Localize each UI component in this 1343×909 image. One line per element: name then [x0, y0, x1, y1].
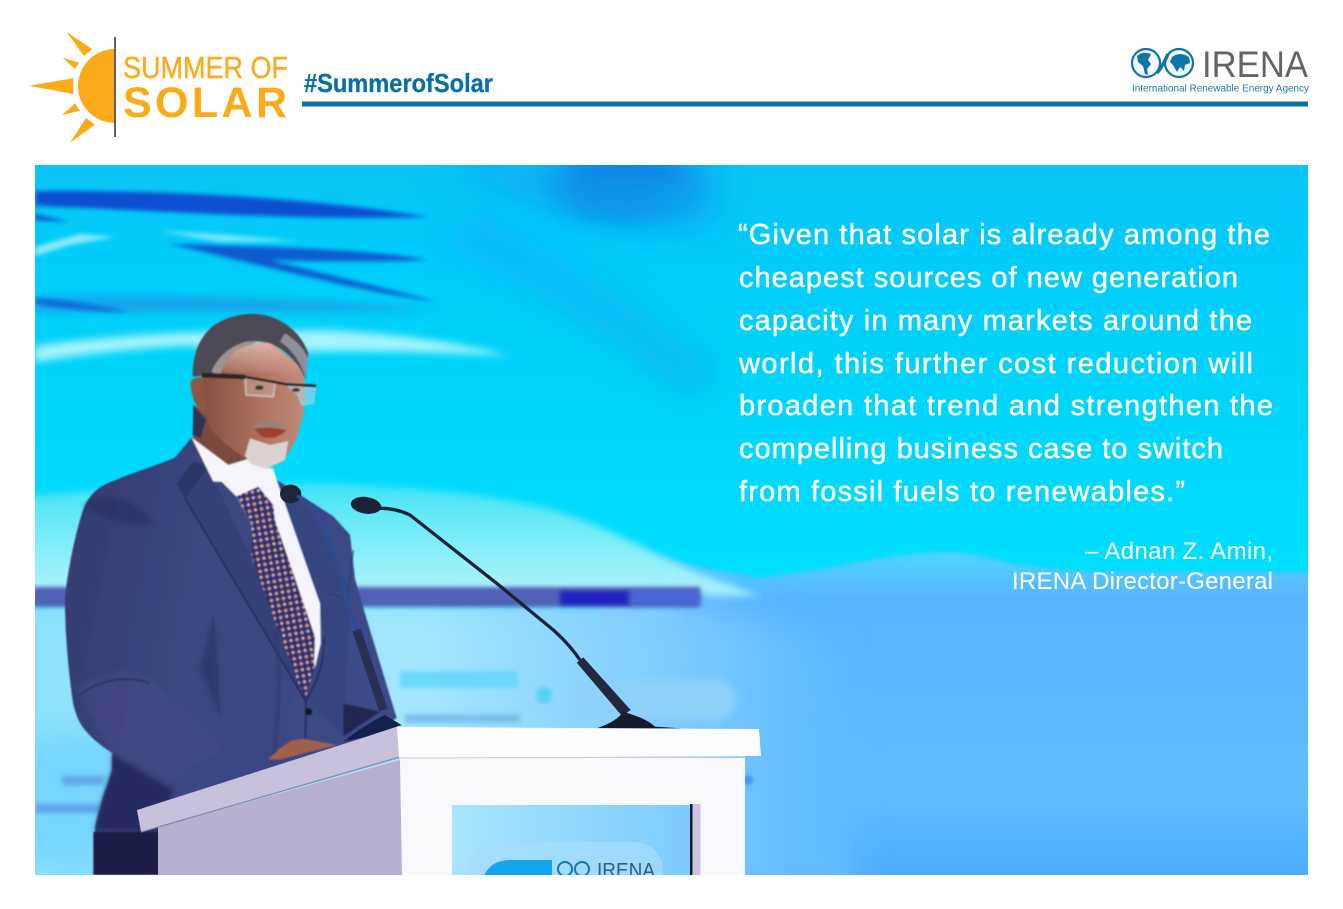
sleeve and pocket gap — [343, 703, 380, 737]
suit — [65, 438, 397, 875]
jacket button — [305, 708, 312, 715]
attribution: IRENA Director-General — [1012, 568, 1273, 595]
podium front — [400, 758, 745, 875]
light area above the band — [20, 483, 760, 596]
quote: from fossil fuels to renewables.” — [739, 476, 1185, 508]
podium screen — [452, 805, 691, 875]
logo text: Summer of: SUMMER OF — [123, 51, 288, 85]
screen logo: IRENA — [597, 860, 656, 882]
speaker — [65, 314, 397, 875]
shirt — [208, 468, 321, 667]
necktie — [237, 487, 315, 700]
podium top front — [397, 727, 761, 758]
hashtag: #SummerofSolar — [304, 68, 493, 98]
blurred screen text — [400, 671, 518, 688]
microphone: speaker side — [280, 485, 402, 742]
attribution: – Adnan Z. Amin, — [1085, 538, 1273, 565]
collar — [192, 438, 277, 482]
podium side panel — [158, 760, 402, 875]
icon: infinity globes — [1132, 49, 1193, 77]
dark band — [30, 587, 700, 607]
light streaks — [35, 234, 115, 256]
quote: compelling business case to switch — [739, 433, 1223, 465]
logo: Summer of Solar — [29, 32, 288, 143]
suit shading — [83, 497, 220, 714]
screen logo — [468, 842, 663, 909]
quote: capacity in many markets around the — [739, 305, 1252, 337]
torso details — [177, 462, 380, 759]
mouth — [254, 428, 287, 438]
soft dark streaks — [555, 152, 695, 212]
podium — [137, 727, 761, 875]
header — [29, 32, 1309, 143]
podium top side — [137, 727, 400, 832]
left lapel — [230, 544, 300, 688]
jacket button seam — [304, 700, 308, 739]
attribution — [1012, 538, 1273, 595]
moustache — [252, 421, 291, 429]
hand — [268, 739, 337, 759]
head — [191, 314, 316, 482]
lower right wave — [600, 540, 1320, 890]
right lapel — [278, 482, 320, 602]
quote — [738, 219, 1273, 508]
logo: IRENA — [1132, 43, 1309, 94]
quote: cheapest sources of new generation — [739, 262, 1238, 294]
wordmark: IRENA — [1202, 43, 1308, 85]
ear — [191, 377, 209, 415]
eyeglasses — [202, 375, 316, 405]
hair — [193, 314, 308, 379]
lower left light area — [20, 604, 860, 900]
beard — [245, 438, 288, 469]
logo text: Solar: SOLAR — [123, 79, 287, 127]
microphone: front — [350, 495, 682, 728]
quote: “Given that solar is already among the — [738, 219, 1270, 251]
icon: sun — [29, 32, 115, 143]
neck — [193, 405, 250, 468]
tagline: International Renewable Energy Agency — [1132, 84, 1309, 94]
quote: world, this further cost reduction will — [738, 348, 1253, 380]
face — [203, 342, 305, 469]
quote: broaden that trend and strengthen the — [739, 390, 1273, 422]
